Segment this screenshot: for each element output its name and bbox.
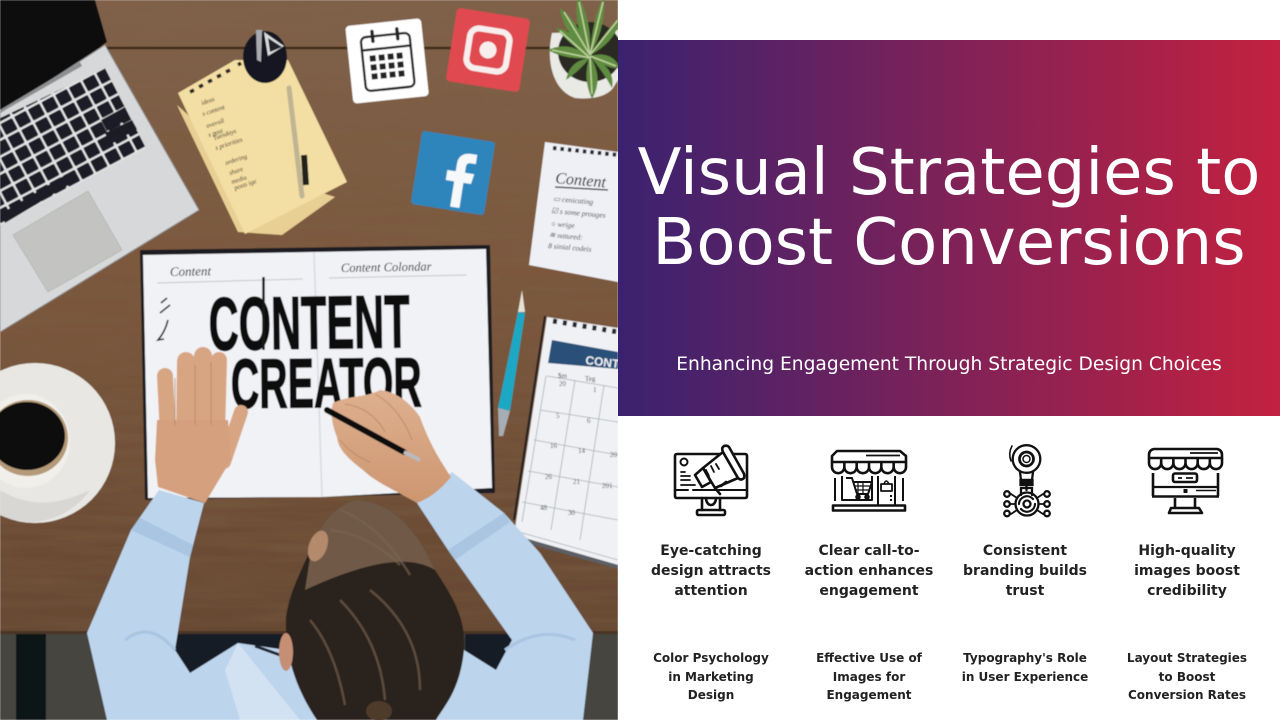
wall calendar bbox=[512, 316, 628, 569]
topic: layout: to Boost bbox=[1159, 670, 1215, 684]
topic: color psychology: Design bbox=[688, 688, 734, 702]
subtitle: Enhancing Engagement Through Strategic Design Choices bbox=[676, 354, 1222, 375]
icon: facebook tile bbox=[411, 131, 495, 215]
header band bbox=[618, 40, 1280, 416]
icon: monitor with megaphone bbox=[674, 444, 748, 516]
title: Boost Conversions bbox=[652, 206, 1246, 280]
topic: images bbox=[816, 651, 922, 702]
wall calendar: 20 bbox=[610, 451, 618, 459]
benefit text: images: images boost bbox=[1134, 563, 1240, 579]
yellow notepad: s content bbox=[201, 104, 226, 118]
wooden table bbox=[0, 0, 618, 634]
hair, back of head bbox=[279, 500, 464, 720]
title bbox=[638, 136, 1260, 280]
topic: images: Effective Use of bbox=[816, 651, 922, 665]
small notebook: content list: ≋ natured: bbox=[549, 230, 583, 242]
yellow notepad: ordering bbox=[224, 153, 249, 167]
yellow notepad: share bbox=[228, 166, 244, 177]
small notebook: content list: Content bbox=[555, 170, 607, 191]
small notebook: content list bbox=[529, 142, 618, 282]
small notebook: content list: ▭ cenicating bbox=[553, 194, 594, 207]
benefit text: branding: trust bbox=[1006, 583, 1044, 599]
benefit text: images: credibility bbox=[1147, 583, 1227, 599]
wall calendar: 30 bbox=[568, 509, 576, 517]
benefit text: branding bbox=[963, 543, 1087, 599]
yellow notepad: s post bbox=[207, 128, 224, 139]
small notebook: content list: ○ wrige bbox=[551, 219, 576, 230]
benefit text: eye-catching: Eye-catching bbox=[660, 543, 762, 559]
icon: monitor storefront bbox=[1148, 448, 1224, 514]
floor below table bbox=[0, 634, 618, 720]
benefit text: eye-catching: attention bbox=[674, 583, 748, 599]
open notebook: Content bbox=[170, 263, 212, 279]
yellow notepad: media bbox=[230, 174, 248, 186]
icon: lightbulb gear and network bbox=[1003, 444, 1051, 518]
topic: typography: Typography's Role bbox=[963, 651, 1087, 665]
wall calendar: 48 bbox=[540, 504, 548, 512]
title: Visual Strategies to bbox=[638, 136, 1260, 210]
small notebook: content list: 8 sinial codeis bbox=[548, 241, 592, 254]
coffee cup on saucer bbox=[0, 363, 115, 523]
yellow notepad: overall bbox=[205, 117, 225, 130]
yellow notepad: s priorities bbox=[214, 136, 244, 152]
topic: images: Engagement bbox=[826, 688, 912, 702]
wall calendar: 1 bbox=[593, 386, 597, 394]
yellow notepad: Tuesdays bbox=[212, 128, 238, 142]
topic: color psychology bbox=[653, 651, 769, 702]
wall calendar: 5 bbox=[556, 412, 560, 420]
wall calendar: 20 bbox=[559, 380, 566, 388]
icon: instagram tile bbox=[446, 8, 530, 92]
wall calendar: 6 bbox=[587, 417, 591, 425]
benefit text: images bbox=[1134, 543, 1240, 599]
benefit text: call-to-action: action enhances bbox=[805, 563, 933, 579]
topic: typography: in User Experience bbox=[962, 670, 1088, 684]
wall calendar: 26 bbox=[545, 473, 552, 481]
benefit text: images: High-quality bbox=[1138, 543, 1236, 559]
topic: images: Images for bbox=[833, 670, 905, 684]
benefit text: eye-catching bbox=[651, 543, 771, 599]
benefit text: eye-catching: design attracts bbox=[651, 563, 771, 579]
notebook heading: content creator: CREATOR bbox=[230, 343, 422, 423]
benefit text: call-to-action: Clear call-to- bbox=[818, 543, 920, 559]
benefit text: call-to-action: engagement bbox=[819, 583, 919, 599]
photo: content creator desk scene bbox=[0, 0, 618, 720]
wall calendar: $m bbox=[558, 372, 568, 380]
small notebook: content list: ☑ s some prouges bbox=[551, 206, 606, 220]
yellow notepad: ideas bbox=[200, 96, 216, 107]
topic: layout bbox=[1127, 651, 1247, 702]
open notebook bbox=[140, 245, 495, 500]
benefit text: branding: branding builds bbox=[963, 563, 1087, 579]
topic: color psychology: in Marketing bbox=[668, 670, 754, 684]
silver pen bbox=[289, 88, 306, 196]
yellow notepad bbox=[177, 60, 347, 235]
topic: color psychology: Color Psychology bbox=[653, 651, 769, 665]
topic: layout: Conversion Rates bbox=[1128, 688, 1246, 702]
left hand bbox=[155, 356, 241, 503]
shirt and arms bbox=[87, 472, 593, 720]
right hand with pen bbox=[327, 390, 451, 503]
wall calendar: Teg bbox=[585, 375, 596, 383]
notebook heading: content creator: CONTENT bbox=[208, 279, 410, 366]
benefit text: call-to-action bbox=[805, 543, 933, 599]
topic: layout: Layout Strategies bbox=[1127, 651, 1247, 665]
potted plant bbox=[548, 0, 622, 99]
open notebook: Content Colondar bbox=[341, 259, 432, 275]
black pen holder bbox=[243, 30, 287, 83]
notebook heading: content creator bbox=[208, 277, 422, 423]
blue pen bbox=[498, 290, 525, 436]
icon: online storefront with cart bbox=[830, 450, 908, 512]
wall calendar: 201 bbox=[602, 482, 613, 490]
wall calendar: 21 bbox=[573, 478, 580, 486]
topic: typography bbox=[962, 651, 1088, 684]
wall calendar: 16 bbox=[550, 442, 558, 450]
benefit text: branding: Consistent bbox=[983, 543, 1067, 559]
icon: calendar tile bbox=[345, 18, 429, 104]
laptop bbox=[0, 0, 199, 332]
wall calendar: 14 bbox=[578, 447, 586, 455]
yellow notepad: posts ige bbox=[233, 178, 258, 192]
